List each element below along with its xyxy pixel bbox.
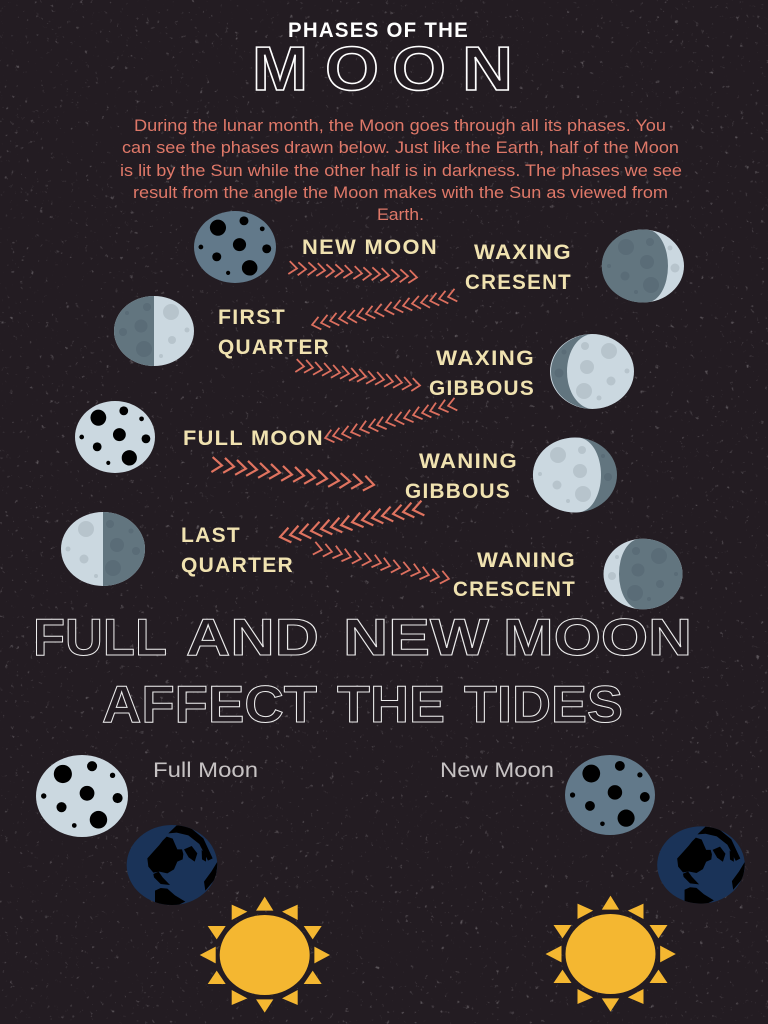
arrow: waning gibbous to last quarter (285, 509, 418, 536)
heading: full and new moon affect the tides: AND (186, 609, 319, 667)
icon: new moon in tide diagram (565, 755, 655, 835)
arrow: waxing gibbous to full moon (329, 405, 452, 437)
icon: waning crescent moon (604, 539, 682, 609)
icon: earth right (657, 826, 745, 906)
label: waxing crescent: CRESENT (465, 271, 572, 294)
label: first quarter (218, 306, 330, 359)
intro paragraph: can see the phases drawn below. Just like the Earth, half of the Moon (122, 138, 679, 157)
title: PHASES OF THE (288, 19, 469, 42)
intro paragraph: Earth. (377, 205, 424, 224)
heading: full and new moon affect the tides: FULL (33, 609, 167, 667)
icon: waning gibbous moon (533, 438, 617, 512)
label: full moon: FULL MOON (183, 427, 324, 450)
heading: full and new moon affect the tides: TIDES (464, 676, 623, 734)
icon: sun right (546, 896, 676, 1012)
arrow: first quarter to waxing gibbous (300, 366, 416, 385)
title: M (252, 35, 308, 104)
arrow: full moon to waning gibbous (217, 465, 369, 484)
label: first quarter: FIRST (218, 306, 286, 329)
label: waxing gibbous: GIBBOUS (429, 377, 535, 400)
heading: full and new moon affect the tides: THE (337, 676, 445, 734)
icon: earth left (127, 825, 218, 907)
label: waning gibbous: GIBBOUS (405, 480, 511, 503)
heading: full and new moon affect the tides: NEW (343, 609, 490, 667)
label: first quarter: QUARTER (218, 336, 330, 359)
label: waning crescent: CRESCENT (453, 578, 576, 601)
icon: full moon (75, 401, 155, 473)
label: waxing crescent (465, 241, 572, 294)
label: waning crescent (453, 549, 576, 601)
label: waning gibbous (405, 450, 518, 503)
title: O (392, 35, 446, 104)
title (252, 19, 513, 104)
label: waxing gibbous: WAXING (436, 347, 535, 370)
label: full moon diagram: Full Moon (153, 759, 258, 782)
label: waxing crescent: WAXING (474, 241, 572, 264)
label: new moon: NEW MOON (302, 236, 438, 259)
label: last quarter: LAST (181, 524, 241, 547)
label: last quarter (181, 524, 294, 577)
label: waxing gibbous (429, 347, 535, 400)
intro paragraph: result from the angle the Moon makes with the Sun as viewed from (133, 183, 668, 202)
icon: new moon (194, 211, 276, 283)
label: last quarter: QUARTER (181, 554, 294, 577)
icon: first quarter moon (114, 296, 194, 366)
label: waning gibbous: WANING (419, 450, 518, 473)
heading: full and new moon affect the tides: AFFECT (102, 676, 317, 734)
icon: waxing crescent moon (602, 229, 684, 302)
title: N (462, 35, 513, 104)
heading: full and new moon affect the tides (33, 609, 692, 734)
label: waning crescent: WANING (477, 549, 576, 572)
arrow: waxing crescent to first quarter (316, 296, 452, 324)
icon: full moon in tide diagram (36, 755, 128, 837)
intro paragraph: is lit by the Sun while the other half is in darkness. The phases we see (120, 161, 682, 180)
intro paragraph (120, 116, 682, 224)
arrow: new moon to waxing crescent (293, 268, 413, 277)
icon: sun left (200, 897, 330, 1013)
arrow: last quarter to waning crescent (318, 549, 445, 578)
icon: last quarter moon (61, 512, 145, 586)
label: new moon diagram: New Moon (440, 759, 554, 782)
intro paragraph: During the lunar month, the Moon goes through all its phases. You (134, 116, 666, 135)
title: O (325, 35, 379, 104)
icon: waxing gibbous moon (550, 334, 634, 409)
heading: full and new moon affect the tides: MOON (503, 609, 692, 667)
